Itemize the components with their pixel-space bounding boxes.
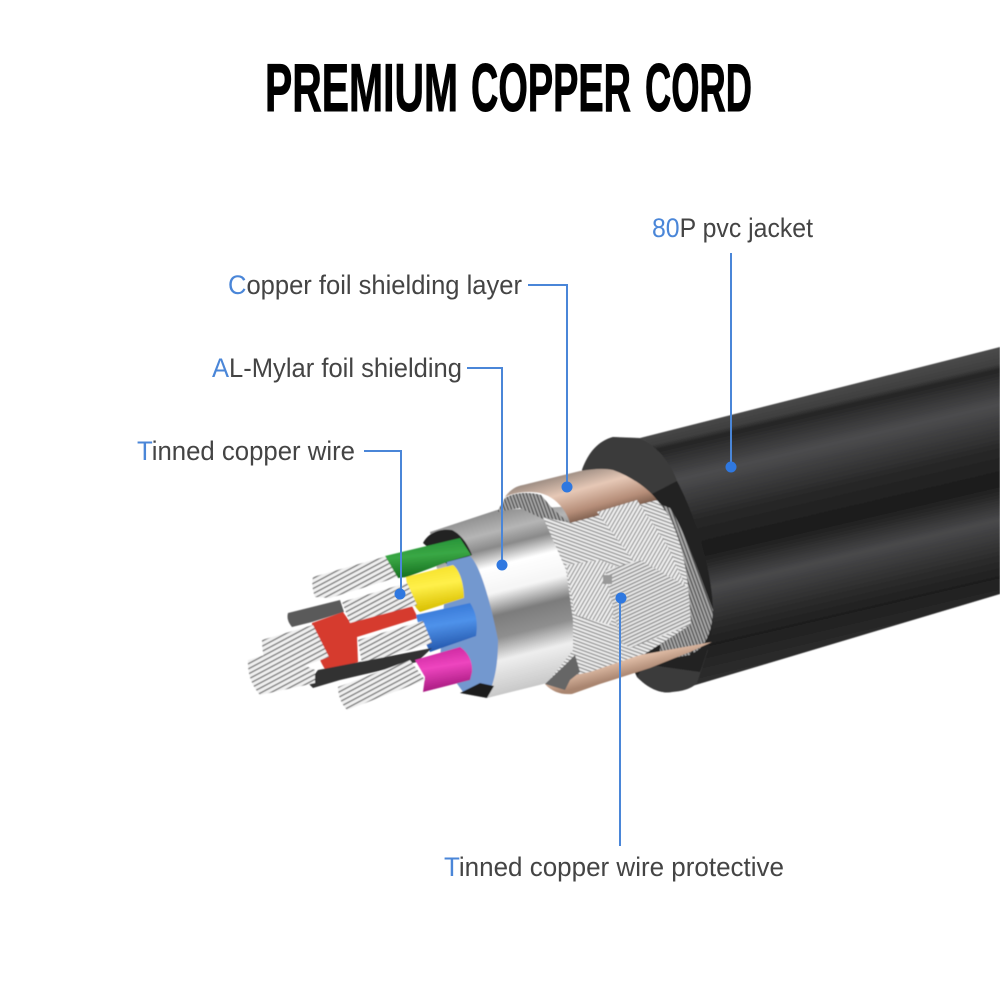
cable opening and blue lining	[423, 530, 498, 698]
label: tinned copper wire protective	[444, 592, 784, 882]
black wire lower	[308, 648, 432, 688]
label: tinned copper wire	[137, 436, 406, 600]
outer braid rim	[660, 503, 698, 660]
strand: bottom	[338, 660, 425, 710]
jacket: 80P pvc	[582, 347, 1000, 692]
strand: upper rear	[312, 556, 398, 598]
tinned copper wire braid	[543, 500, 713, 683]
strand: left large	[262, 625, 329, 677]
label: AL-Mylar foil shielding	[212, 353, 508, 570]
black wire upper	[288, 600, 344, 627]
title	[265, 50, 752, 126]
label: tinned copper wire protective: Tinned copper wire protective	[444, 852, 784, 882]
red wire	[312, 606, 418, 672]
copper foil bottom edge	[545, 642, 712, 694]
cable illustration	[248, 347, 1000, 710]
title: PREMIUM	[265, 50, 458, 126]
label: AL-Mylar foil shielding: AL-Mylar foil shielding	[212, 353, 462, 383]
inner jacket shadow	[650, 481, 713, 672]
title: COPPER	[471, 50, 631, 126]
label: 80P pvc jacket	[652, 213, 813, 472]
green wire	[385, 538, 471, 578]
label: copper foil shielding layer	[228, 270, 572, 492]
title: CORD	[645, 50, 752, 126]
strand: centre lower	[358, 621, 432, 664]
strand: centre upper	[342, 583, 417, 623]
magenta wire	[415, 647, 472, 692]
label: 80P pvc jacket: 80P pvc jacket	[652, 213, 813, 243]
blue wire	[416, 603, 477, 652]
silver AL-Mylar foil tube	[430, 505, 600, 698]
copper foil shielding top band	[497, 469, 657, 523]
yellow wire	[406, 565, 464, 612]
strand: lower left front	[248, 652, 315, 695]
label: tinned copper wire: Tinned copper wire	[137, 436, 355, 466]
label: copper foil shielding layer: Copper foil shielding layer	[228, 270, 522, 300]
